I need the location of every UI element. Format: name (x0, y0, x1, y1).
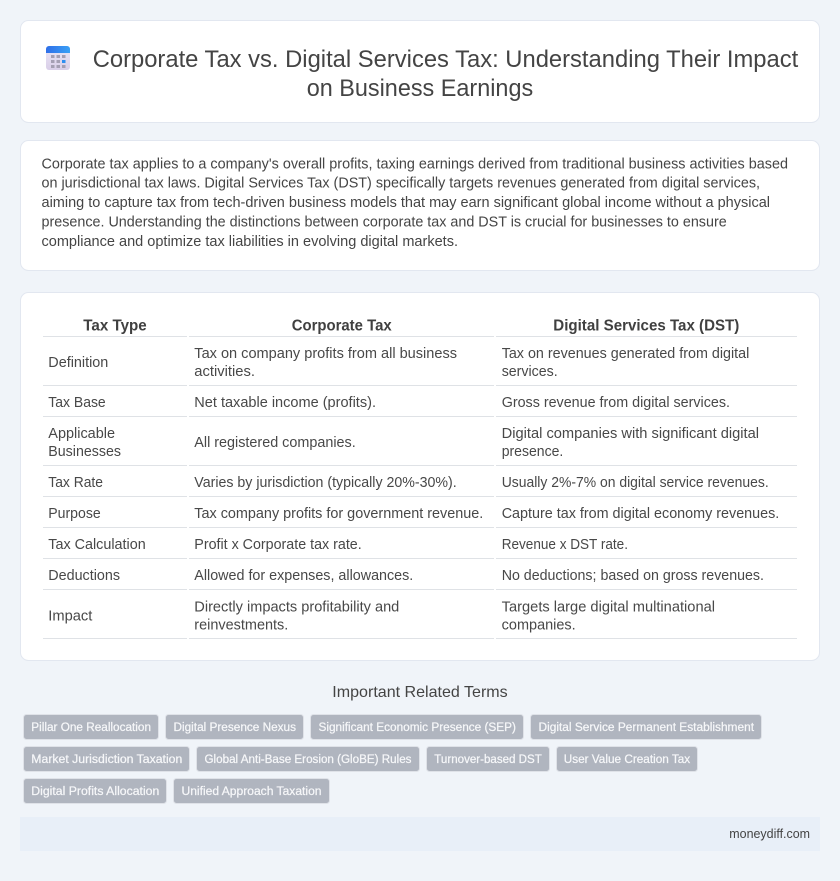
row: Definition: Tax on company profits from all business (194, 346, 457, 362)
row: Definition: activities. (194, 364, 255, 380)
row: Applicable Businesses: presence. (502, 444, 563, 460)
title: on Business Earnings (307, 75, 533, 102)
tag: Turnover-based DST (434, 752, 542, 766)
row: Impact: Impact (48, 608, 92, 624)
row: Tax Calculation (48, 537, 628, 553)
panel: introduction text (20, 140, 820, 270)
tag (174, 778, 330, 804)
row: Applicable Businesses: All registered companies. (194, 435, 356, 451)
text block: intro paragraph (42, 156, 788, 250)
tag (530, 714, 762, 740)
row: Applicable Businesses: Businesses (48, 444, 121, 460)
tag (426, 746, 550, 772)
tag: Market Jurisdiction Taxation (31, 752, 182, 766)
footer source text: moneydiff.com (729, 826, 810, 841)
row: Definition: Definition (48, 355, 108, 371)
tag: Unified Approach Taxation (182, 784, 322, 798)
row: Purpose (48, 506, 779, 522)
row: Tax Calculation: Tax Calculation (48, 537, 146, 553)
row: Tax Rate: Usually 2%-7% on digital service revenues. (502, 475, 769, 491)
icon: calendar (46, 46, 70, 70)
row: Impact (48, 600, 715, 634)
text block: intro paragraph: presence. Understanding the distinctions between corporate tax and DST is crucial for businesses to ensure (42, 214, 727, 230)
text block: intro paragraph: Corporate tax applies to a company's overall profits, taxing earnings derived from traditional business activities based (42, 156, 788, 172)
row: Definition (48, 346, 749, 380)
row: Tax Rate (48, 475, 769, 491)
tag (196, 746, 420, 772)
tag: Digital Presence Nexus (174, 720, 296, 734)
tag (166, 714, 304, 740)
row: Tax Base (48, 395, 730, 411)
tag: Significant Economic Presence (SEP) (318, 720, 516, 734)
row: Tax Rate: Tax Rate (48, 475, 103, 491)
row: Tax Base: Net taxable income (profits). (194, 395, 376, 411)
row: Impact: Directly impacts profitability and (194, 600, 399, 616)
row: Deductions (48, 568, 764, 584)
tag: Digital Service Permanent Establishment (538, 720, 755, 734)
row: Applicable Businesses: Applicable (48, 426, 115, 442)
row: Purpose: Purpose (48, 506, 101, 522)
row: Tax Calculation: Revenue x DST rate. (502, 537, 628, 553)
table header row (83, 318, 739, 335)
text block: intro paragraph: on jurisdictional tax laws. Digital Services Tax (DST) specifically targets revenues generated from digital services, (42, 176, 760, 192)
tag list: related terms (24, 714, 762, 804)
row: Purpose: Tax company profits for government revenue. (194, 506, 483, 522)
tag (556, 746, 698, 772)
text block: intro paragraph: compliance and optimize tax liabilities in evolving digital markets. (42, 234, 458, 250)
table header row: Digital Services Tax (DST) (553, 318, 739, 335)
footer bar (20, 817, 820, 851)
row: Impact: reinvestments. (194, 618, 288, 634)
tag: Pillar One Reallocation (31, 720, 151, 734)
text block: intro paragraph: aiming to capture tax from tech-driven business models that may earn significant global income without a physical (42, 195, 770, 211)
title (93, 46, 799, 102)
tag (310, 714, 524, 740)
tag (24, 714, 158, 740)
tag (24, 746, 190, 772)
tag: User Value Creation Tax (564, 752, 690, 766)
tag: Global Anti-Base Erosion (GloBE) Rules (204, 752, 412, 766)
row: Definition: services. (502, 364, 558, 380)
panel: comparison table (20, 292, 820, 660)
row: Deductions: Deductions (48, 568, 120, 584)
panel: title header (20, 20, 820, 122)
row: Tax Calculation: Profit x Corporate tax rate. (194, 537, 362, 553)
row: Tax Base: Gross revenue from digital services. (502, 395, 730, 411)
row: Impact: companies. (502, 618, 576, 634)
tag (24, 778, 166, 804)
row: Deductions: No deductions; based on gross revenues. (502, 568, 764, 584)
row: Applicable Businesses: Digital companies with significant digital (502, 426, 759, 442)
tag: Digital Profits Allocation (31, 784, 159, 798)
heading: important related terms: Important Related Terms (332, 684, 508, 701)
row: Tax Rate: Varies by jurisdiction (typically 20%-30%). (194, 475, 457, 491)
row: Impact: Targets large digital multinational (502, 600, 715, 616)
row: Deductions: Allowed for expenses, allowances. (194, 568, 413, 584)
row: Applicable Businesses (48, 426, 759, 460)
table header row: Tax Type (83, 318, 147, 335)
title: Corporate Tax vs. Digital Services Tax: Understanding Their Impact (93, 46, 799, 73)
table header row: Corporate Tax (292, 318, 392, 335)
row: Tax Base: Tax Base (48, 395, 106, 411)
row: Purpose: Capture tax from digital economy revenues. (502, 506, 779, 522)
row: Definition: Tax on revenues generated from digital (502, 346, 749, 362)
